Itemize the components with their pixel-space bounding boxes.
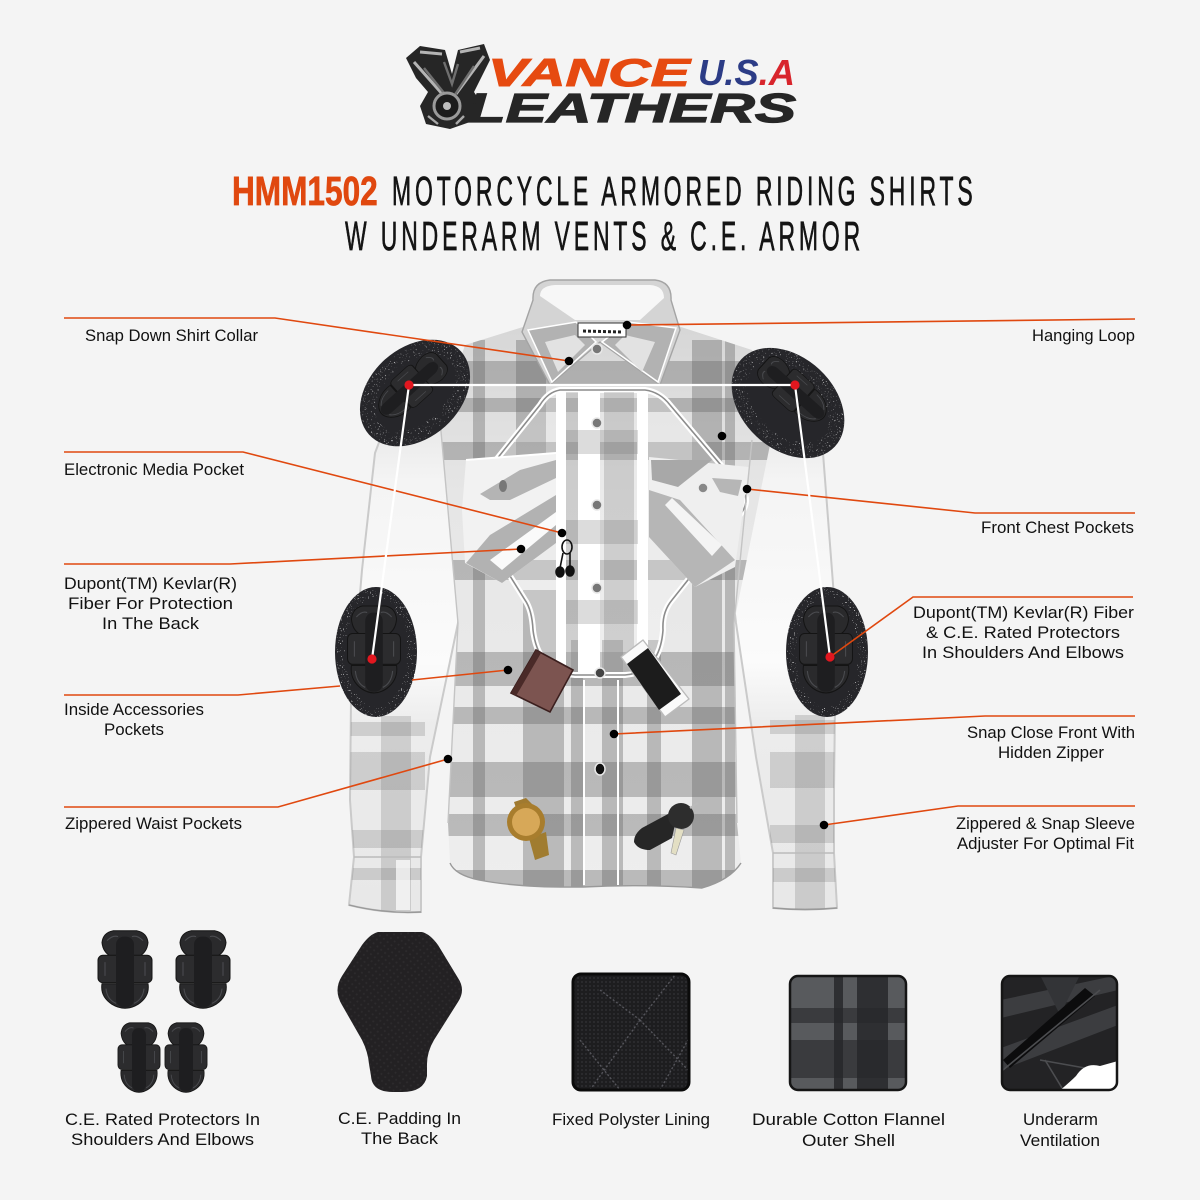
panel: left sleeve (348, 431, 458, 914)
label: kevlar back: In The Back (102, 614, 200, 633)
swatch: flannel plaid (789, 975, 907, 1091)
icon: earphones (556, 540, 574, 577)
callout: right elbow armor (786, 587, 868, 717)
caption: Outer Shell (802, 1131, 895, 1150)
red armor markers (367, 380, 835, 664)
label: inside accessories pockets (64, 700, 204, 739)
caption: Ventilation (1020, 1131, 1100, 1150)
panel: back protector outline (467, 390, 746, 675)
label: inside accessories pockets: Inside Accessories (64, 700, 204, 719)
snap buttons (592, 344, 605, 775)
label: sleeve adjuster (956, 814, 1135, 853)
label: kevlar fiber and protectors: In Shoulders And Elbows (922, 643, 1124, 662)
hem and placket lines (349, 420, 837, 912)
caption: The Back (361, 1129, 439, 1148)
caption: Durable Cotton Flannel (752, 1110, 945, 1129)
line: inside accessories pockets (64, 670, 508, 695)
leader lines (64, 318, 1135, 825)
caption (65, 1110, 260, 1149)
title: W UNDERARM VENTS & C.E. ARMOR (345, 214, 860, 260)
left chest pocket (462, 453, 556, 583)
title: HMM1502 (232, 169, 378, 215)
callout: right shoulder armor (710, 326, 866, 480)
logo: Vance Leathers USA (406, 44, 796, 131)
caption: C.E. Rated Protectors In (65, 1110, 260, 1129)
caption: Fixed Polyster Lining (552, 1110, 710, 1129)
line: front chest pockets (747, 489, 1135, 513)
right chest pocket (649, 457, 749, 587)
panel: right sleeve (735, 454, 838, 910)
feature: CE back padding (338, 932, 462, 1148)
label: zippered waist pockets: Zippered Waist Pockets (65, 814, 242, 833)
label: kevlar fiber and protectors: Dupont(TM) Kevlar(R) Fiber (913, 603, 1134, 622)
icon: back pad (338, 932, 462, 1092)
caption: C.E. Padding In (338, 1109, 461, 1128)
label: sleeve adjuster: Adjuster For Optimal Fit (957, 834, 1134, 853)
caption (1020, 1110, 1100, 1150)
white connector lines (372, 385, 830, 659)
line: hanging loop (627, 319, 1135, 325)
icon: shoulder and elbow protectors (98, 931, 230, 1092)
icon: car key (634, 803, 698, 855)
feature: CE protectors (65, 931, 260, 1149)
callout: left shoulder armor (339, 318, 491, 468)
line: sleeve adjuster (824, 806, 1135, 825)
caption: Shoulders And Elbows (71, 1130, 254, 1149)
icon: v-twin engine (406, 44, 490, 129)
label: kevlar back: Fiber For Protection (68, 594, 233, 613)
caption: Underarm (1023, 1110, 1098, 1129)
panel: shirt body plaid (430, 320, 770, 900)
swatch: underarm vent (1001, 975, 1119, 1092)
label: kevlar fiber and protectors (913, 603, 1134, 662)
wordmark: U.S.A: U.S.A (698, 52, 795, 93)
caption (338, 1109, 461, 1148)
label: kevlar back (64, 574, 237, 633)
title: MOTORCYCLE ARMORED RIDING SHIRTS (392, 169, 973, 215)
icon: smartphone (621, 640, 689, 717)
label: kevlar fiber and protectors: & C.E. Rated Protectors (926, 623, 1120, 642)
label: inside accessories pockets: Pockets (104, 720, 164, 739)
wordmark: LEATHERS: LEATHERS (468, 85, 796, 131)
collar (522, 280, 680, 385)
line: snap down shirt collar (64, 318, 569, 361)
label: snap close front: Hidden Zipper (998, 743, 1104, 762)
callout dots (444, 321, 828, 829)
feature: cotton flannel (752, 975, 945, 1150)
line: zippered waist pockets (64, 759, 448, 807)
feature: polyester lining (552, 974, 710, 1129)
feature: underarm ventilation (1001, 975, 1119, 1150)
label: front chest pockets: Front Chest Pockets (981, 518, 1134, 537)
label: hanging loop: Hanging Loop (1032, 326, 1135, 345)
line: kevlar shoulders and elbows (830, 597, 1133, 657)
title (232, 169, 973, 260)
callout: left elbow armor (335, 587, 417, 717)
label: snap close front (967, 723, 1135, 762)
caption (752, 1110, 945, 1150)
line: snap close front (614, 716, 1135, 734)
wordmark: VANCE: VANCE (488, 52, 691, 95)
shirt illustration (340, 280, 840, 912)
line: kevlar back (64, 549, 521, 564)
label: snap down shirt collar: Snap Down Shirt Collar (85, 326, 258, 345)
line: electronic media pocket (64, 452, 562, 533)
label: sleeve adjuster: Zippered & Snap Sleeve (956, 814, 1135, 833)
icon: gold watch (507, 798, 549, 860)
label: snap close front: Snap Close Front With (967, 723, 1135, 742)
label: kevlar back: Dupont(TM) Kevlar(R) (64, 574, 237, 593)
swatch: mesh lining (573, 974, 689, 1090)
icon: wallet (511, 650, 573, 712)
label: electronic media pocket: Electronic Media Pocket (64, 460, 244, 479)
